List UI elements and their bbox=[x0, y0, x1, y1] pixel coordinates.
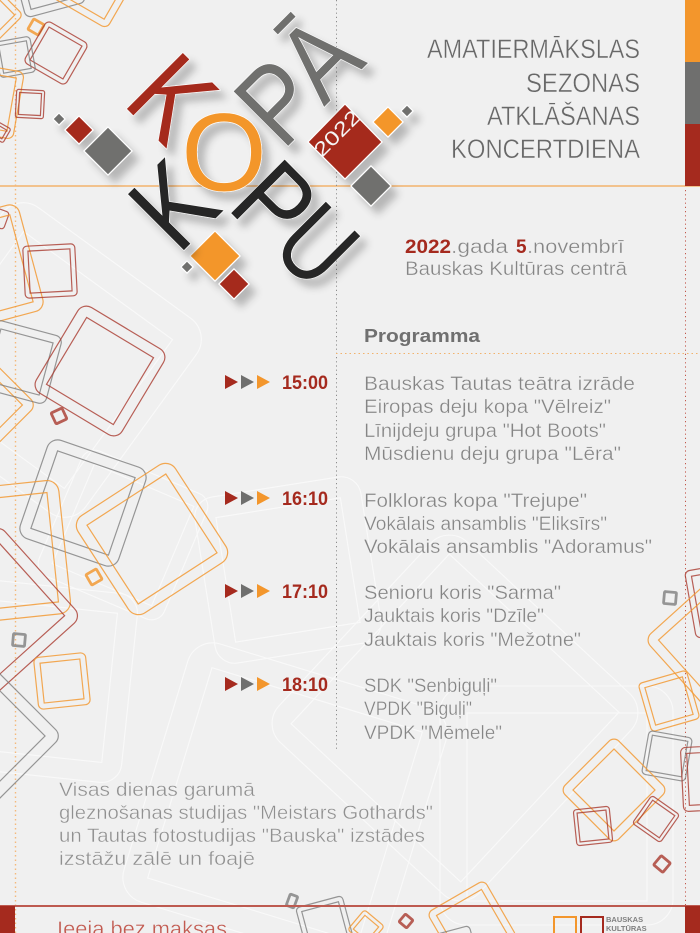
background white outline squares bbox=[0, 192, 673, 933]
schedule 18:10 bbox=[225, 675, 502, 744]
footer band bbox=[0, 905, 700, 933]
heading: concert title: KONCERTDIENA bbox=[451, 134, 640, 164]
logo year: 2022 bbox=[310, 106, 365, 162]
exhibition note bbox=[59, 779, 433, 870]
schedule 17:10: Jauktais koris "Dzīle" bbox=[364, 606, 544, 627]
date and venue: 5 bbox=[516, 237, 527, 258]
exhibition note: un Tautas fotostudijas "Bauska" izstādes bbox=[59, 825, 425, 847]
logo word: KOPĀ: K bbox=[104, 29, 241, 167]
schedule 16:10: Folkloras kopa "Trejupe" bbox=[364, 491, 587, 512]
logo word: KOPĀ: P bbox=[212, 36, 345, 169]
schedule 15:00: Mūsdienu deju grupa "Lēra" bbox=[364, 444, 621, 465]
logo diamonds bbox=[53, 104, 413, 299]
heading: concert title: SEZONAS bbox=[526, 68, 640, 98]
schedule 17:10: Jauktais koris "Mežotne" bbox=[364, 630, 581, 651]
date and venue: 2022 bbox=[405, 237, 451, 258]
footer logo: Bauskas Kultūras centrs: KULTŪRAS bbox=[606, 924, 647, 933]
decorative squares: left column bbox=[0, 203, 232, 818]
schedule 17:10 bbox=[225, 582, 581, 651]
schedule 18:10: VPDK "Mēmele" bbox=[364, 723, 502, 744]
schedule 16:10: Vokālais ansamblis "Eliksīrs" bbox=[364, 514, 607, 535]
schedule 18:10: SDK "Senbiguļi" bbox=[364, 676, 497, 697]
logo word: KOPĀ: O bbox=[181, 92, 267, 214]
logo word: KOPU: K bbox=[104, 136, 242, 273]
footer logo: Bauskas Kultūras centrs: BAUSKAS bbox=[606, 915, 643, 924]
heading: Programma: Programma bbox=[364, 326, 481, 346]
schedule 16:10: Vokālais ansamblis "Adoramus" bbox=[364, 537, 652, 558]
schedule 15:00: Eiropas deju kopa "Vēlreiz" bbox=[364, 397, 611, 418]
schedule 16:10 bbox=[225, 489, 652, 558]
logo: Kopā kopu 2022 bbox=[53, 0, 413, 309]
date and venue: .novembrī bbox=[527, 237, 625, 258]
decorative squares: top left cluster bbox=[0, 0, 139, 143]
decorative squares: bottom row bbox=[286, 880, 517, 933]
exhibition note: Visas dienas garumā bbox=[59, 779, 255, 801]
logo word: KOPU: P bbox=[209, 138, 340, 269]
exhibition note: gleznošanas studijas "Meistars Gothards" bbox=[59, 802, 433, 824]
schedule 15:00: Līnijdeju grupa "Hot Boots" bbox=[364, 421, 606, 442]
logo word: KOPĀ bbox=[104, 0, 385, 214]
schedule 16:10: 16:10 bbox=[282, 489, 328, 510]
schedule 18:10: 18:10 bbox=[282, 675, 328, 696]
heading: concert title: ATKLĀŠANAS bbox=[487, 100, 640, 131]
heading: concert title: AMATIERMĀKSLAS bbox=[427, 34, 640, 64]
logo word: KOPU: U bbox=[253, 180, 382, 309]
date and venue: Bauskas Kultūras centrā bbox=[405, 259, 627, 280]
heading: concert title bbox=[427, 34, 640, 164]
right colour bar bbox=[685, 0, 700, 186]
schedule 17:10: Senioru koris "Sarma" bbox=[364, 583, 561, 604]
date and venue bbox=[405, 237, 627, 280]
footer logo: Bauskas Kultūras centrs bbox=[554, 915, 647, 933]
exhibition note: izstāžu zālē un foajē bbox=[59, 848, 255, 870]
schedule 15:00 bbox=[225, 373, 635, 465]
schedule 18:10: VPDK "Biguļi" bbox=[364, 699, 472, 720]
schedule 17:10: 17:10 bbox=[282, 582, 328, 603]
decorative squares: right cluster bbox=[560, 562, 700, 872]
date and venue: .gada bbox=[451, 237, 509, 258]
schedule 15:00: 15:00 bbox=[282, 373, 328, 394]
logo word: KOPU bbox=[104, 136, 382, 309]
schedule 15:00: Bauskas Tautas teātra izrāde bbox=[364, 374, 635, 395]
